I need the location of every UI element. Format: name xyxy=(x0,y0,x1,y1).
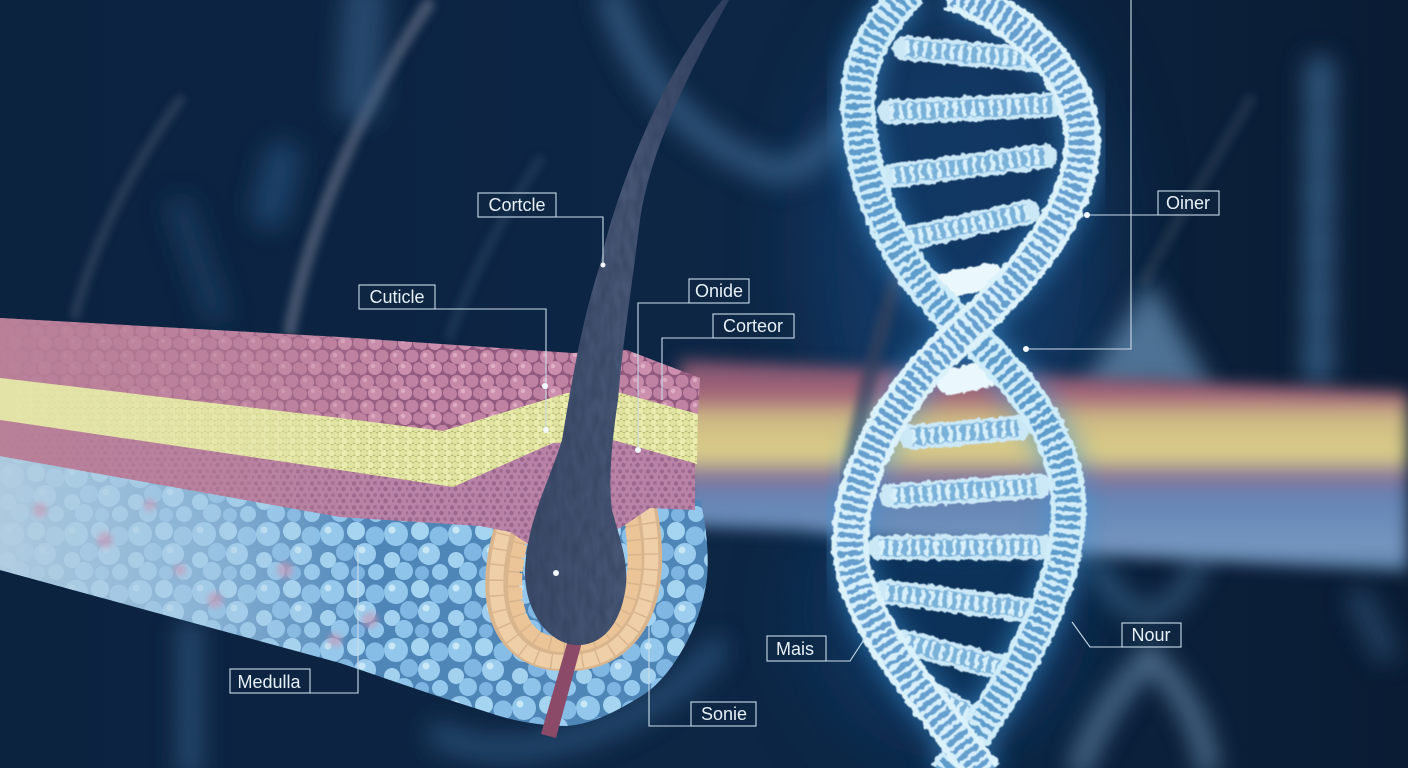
label: Sonie xyxy=(649,625,756,726)
label: Onide: Onide xyxy=(695,281,743,301)
layer: lower pink dermis xyxy=(0,410,695,560)
label: Mais xyxy=(767,636,865,661)
DNA double helix xyxy=(850,0,1082,768)
label: Corteor xyxy=(662,314,794,400)
DNA strand A xyxy=(858,0,1069,768)
layer: yellow cells xyxy=(0,370,698,487)
label: Nour: Nour xyxy=(1131,625,1171,645)
label: Cortcle xyxy=(478,193,606,268)
DNA rungs xyxy=(880,48,1052,715)
label: Oiner: Oiner xyxy=(1166,193,1210,213)
label: Medula: Medulla xyxy=(237,672,302,692)
label: Cuticle: Cuticle xyxy=(369,287,425,307)
label: Onide xyxy=(635,279,749,453)
marker dot on hair bulb xyxy=(553,570,559,576)
skin block cross-section xyxy=(0,310,708,726)
layer: top pink cells xyxy=(0,318,700,431)
blurred background hair strands xyxy=(75,5,1250,335)
layer: blue cells xyxy=(0,440,708,726)
hair root xyxy=(541,640,582,738)
left-side depth blur xyxy=(0,318,366,510)
hair shaft and bulb xyxy=(525,0,729,645)
label: Corteor: Corteor xyxy=(723,316,783,336)
label: Sonie: Sonie xyxy=(701,704,747,724)
hair follicle rings xyxy=(496,500,651,662)
label: Mais: Mais xyxy=(776,639,814,659)
DNA strand B xyxy=(850,0,1082,768)
label: Medula xyxy=(230,545,358,693)
DNA glow xyxy=(850,0,1082,768)
label: Cortcle: Cortcle xyxy=(488,195,546,215)
label: Cuticle xyxy=(359,285,549,433)
DNA helix body xyxy=(850,0,1082,768)
label: Nour xyxy=(1072,622,1181,647)
blurred hair over band xyxy=(845,270,900,500)
blurred background skin band xyxy=(680,360,1408,572)
label: Oiner xyxy=(1084,191,1219,218)
callout line: upper DNA strand xyxy=(1023,0,1131,352)
